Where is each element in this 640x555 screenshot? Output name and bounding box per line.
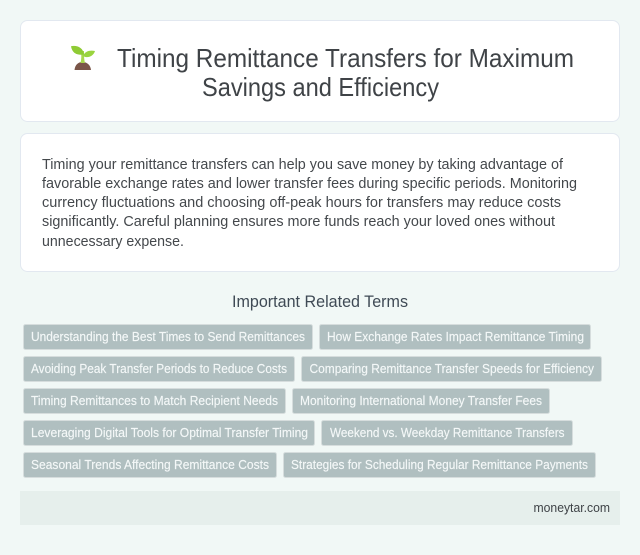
tag	[24, 388, 286, 414]
title: Timing Remittance Transfers for Maximum	[117, 43, 574, 73]
tags: related terms	[24, 324, 602, 478]
tag	[24, 324, 312, 350]
footer	[20, 491, 620, 525]
tag	[322, 420, 572, 446]
text block: description: favorable exchange rates and lower transfer fees during specific periods. Monitoring	[42, 175, 577, 192]
tag: Weekend vs. Weekday Remittance Transfers	[330, 425, 565, 440]
tag	[284, 452, 596, 478]
footer: moneytar.com	[534, 501, 610, 515]
tag: Avoiding Peak Transfer Periods to Reduce Costs	[31, 361, 287, 376]
text block: description: Timing your remittance transfers can help you save money by taking advantage of	[42, 156, 564, 173]
tag	[302, 356, 602, 382]
title: Savings and Efficiency	[202, 72, 439, 102]
text block: description: currency fluctuations and choosing off-peak hours for transfers may reduce costs	[42, 194, 561, 211]
tag: Timing Remittances to Match Recipient Needs	[31, 393, 278, 408]
text block: description: significantly. Careful planning ensures more funds reach your loved ones without	[42, 213, 556, 230]
tag	[24, 356, 294, 382]
heading: related terms: Important Related Terms	[232, 293, 408, 311]
tag: Seasonal Trends Affecting Remittance Costs	[31, 457, 269, 472]
text block: description: unnecessary expense.	[42, 233, 184, 250]
title	[117, 43, 574, 102]
tag: How Exchange Rates Impact Remittance Timing	[327, 329, 584, 344]
tag: Understanding the Best Times to Send Remittances	[31, 329, 305, 344]
tag	[24, 452, 276, 478]
tag: Comparing Remittance Transfer Speeds for Efficiency	[310, 361, 594, 376]
icon: seedling	[71, 46, 95, 70]
tag	[320, 324, 590, 350]
tag: Strategies for Scheduling Regular Remittance Payments	[291, 457, 588, 472]
tag: Monitoring International Money Transfer Fees	[300, 393, 542, 408]
tag	[24, 420, 314, 446]
text block: description	[42, 156, 577, 250]
tag	[292, 388, 550, 414]
tag: Leveraging Digital Tools for Optimal Transfer Timing	[31, 425, 308, 440]
panel: description	[20, 134, 620, 272]
panel: title card	[20, 20, 620, 122]
